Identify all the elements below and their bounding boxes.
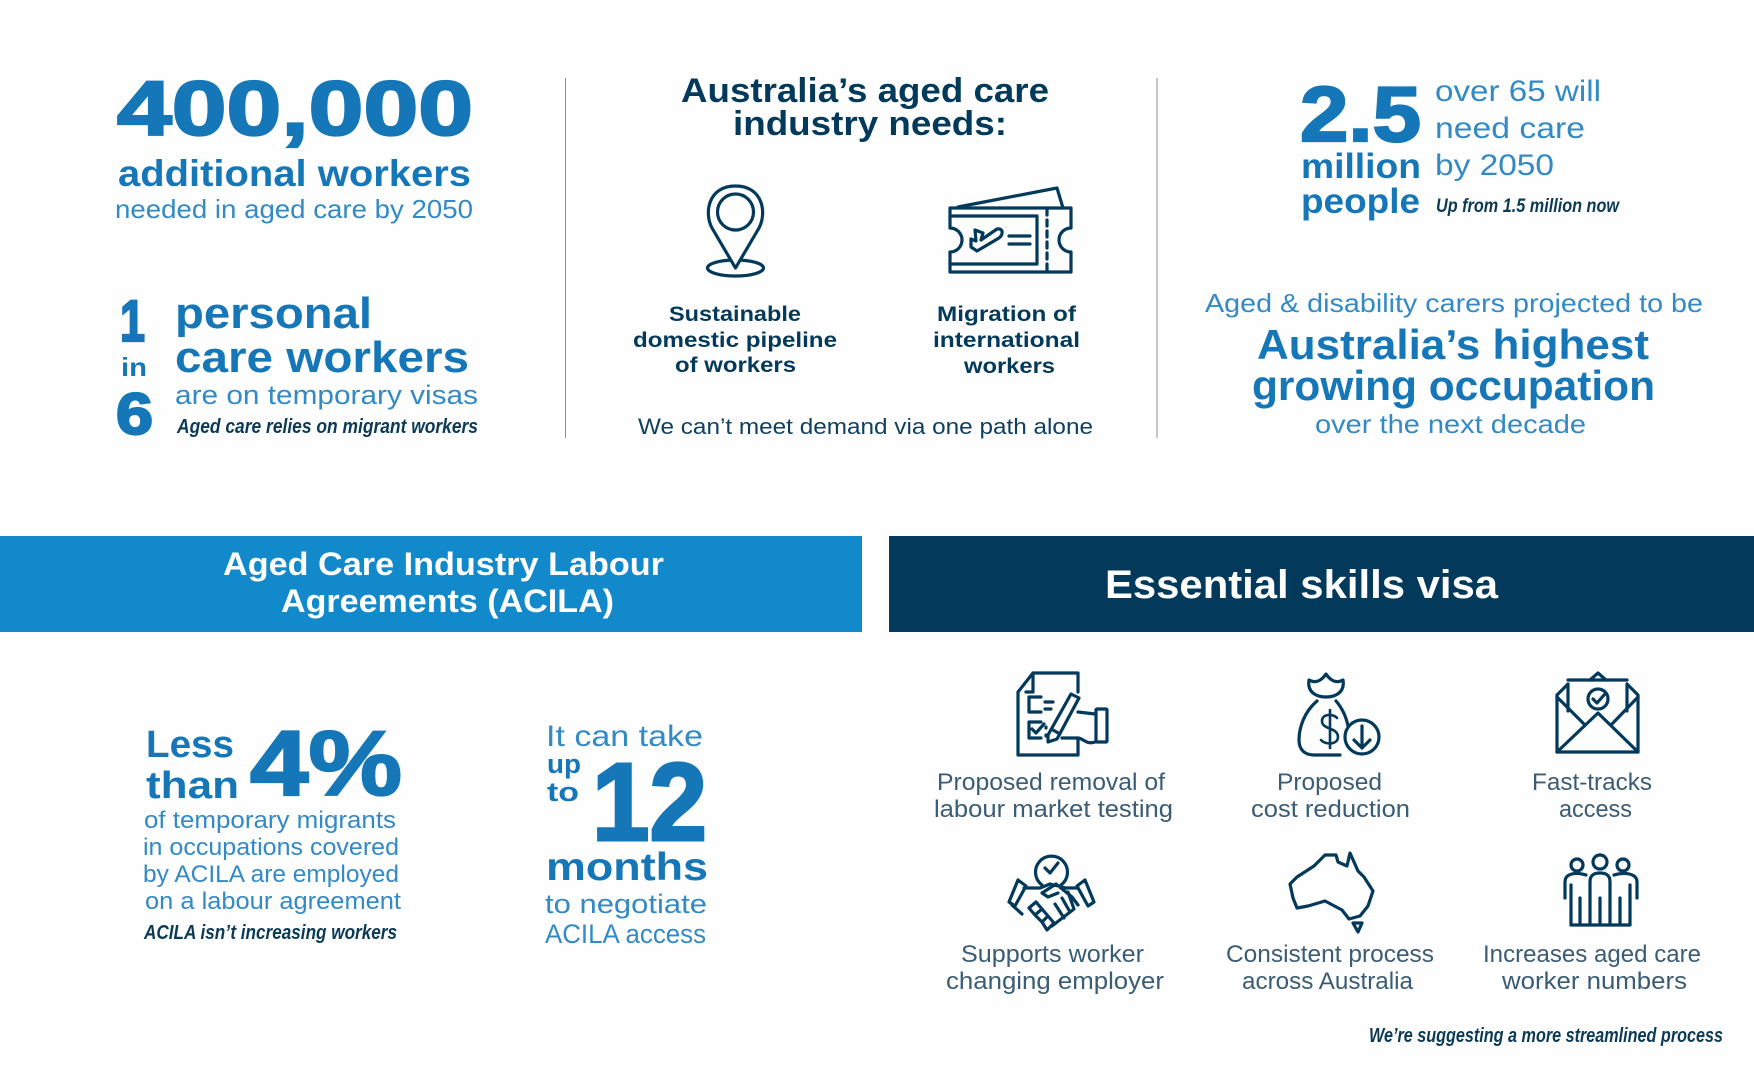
text: cost reduction: cost reduction (1251, 796, 1410, 823)
statistic: 1 in 6 (116, 289, 153, 447)
statistic: up to 12 months: months (546, 846, 708, 889)
panel: essential skills visa benefits (934, 673, 1723, 1047)
banner: ACILA: Agreements (ACILA) (281, 583, 614, 619)
icon: group of people (1565, 855, 1637, 925)
text: changing employer (946, 941, 1164, 995)
banner: essential skills visa: Essential skills visa (1105, 563, 1499, 607)
text: changing employer: Supports worker (961, 941, 1144, 968)
panel: up to 12 months (545, 720, 708, 949)
caption: over 65: over 65 will (1435, 75, 1601, 108)
statistic: up to 12 months: to (547, 777, 579, 807)
label: international migration: Migration of (937, 303, 1077, 326)
heading: personal care workers: personal (175, 289, 372, 338)
banner: ACILA (0, 536, 862, 632)
text: fast-tracks access: access (1559, 796, 1632, 823)
statistic: up to 12 months (546, 741, 708, 889)
heading: highest growing occupation (1252, 321, 1655, 409)
caption: temporary migrants: in occupations covered (143, 834, 399, 861)
text: cost reduction (1251, 769, 1410, 823)
heading: personal care workers: care workers (175, 333, 469, 382)
statistic: 1 in 6: in (121, 352, 147, 382)
caption: temporary migrants (143, 807, 401, 915)
statistic: up to 12 months: up (547, 749, 581, 779)
caption: one path alone: We can’t meet demand via one path alone (638, 414, 1093, 439)
caption: temporary migrants: by ACILA are employed (143, 861, 399, 888)
label: domestic pipeline: domestic pipeline (633, 329, 837, 352)
caption: negotiate access: to negotiate (545, 889, 707, 919)
statistic: 400,000: 400,000 (117, 66, 473, 152)
statistic: less than 4%: than (146, 765, 239, 807)
heading: additional workers: additional workers (118, 153, 471, 194)
text: changing employer: changing employer (946, 968, 1164, 995)
handwritten note: ACILA not increasing workers: ACILA isn’t increasing workers (143, 922, 397, 944)
statistic: 2.5 million people: 2.5 (1300, 70, 1421, 158)
text: consistent process (1226, 941, 1434, 995)
text: labour market testing: labour market testing (934, 796, 1173, 823)
caption: over 65: by 2050 (1435, 149, 1554, 182)
icon: document and pen (1018, 673, 1107, 755)
caption: negotiate access (545, 889, 707, 949)
text: labour market testing: Proposed removal of (937, 769, 1165, 796)
caption: needed by 2050: needed in aged care by 2050 (115, 194, 473, 224)
caption: it can take: It can take (546, 720, 703, 753)
statistic: 2.5 million people (1300, 70, 1421, 221)
caption: temporary migrants: on a labour agreement (145, 888, 401, 915)
label: international migration (933, 303, 1080, 378)
text: fast-tracks access: Fast-tracks (1532, 769, 1652, 796)
handwritten note: migrant workers: Aged care relies on migrant workers (176, 416, 478, 438)
text: consistent process: across Australia (1242, 968, 1414, 995)
label: domestic pipeline (633, 303, 837, 377)
heading: highest growing occupation: growing occupation (1252, 362, 1655, 409)
panel: industry needs (633, 72, 1093, 439)
banner: ACILA: Aged Care Industry Labour (223, 546, 664, 582)
statistic: less than 4% (146, 713, 402, 815)
statistic: 1 in 6: 6 (116, 382, 153, 447)
label: international migration: workers (963, 355, 1055, 378)
caption: over 65: need care (1435, 112, 1585, 145)
icon: money bag (1299, 674, 1379, 755)
caption: negotiate access: ACILA access (545, 919, 706, 949)
panel: less than 4% (143, 713, 402, 944)
heading: industry needs: Australia’s aged care (681, 72, 1049, 110)
text: consistent process: Consistent process (1226, 941, 1434, 968)
heading: industry needs: industry needs: (733, 105, 1007, 143)
text: labour market testing (934, 769, 1173, 823)
handwritten note: up from 1.5 million: Up from 1.5 million now (1436, 196, 1620, 217)
statistic: 2.5 million people: people (1301, 182, 1420, 221)
text: cost reduction: Proposed (1277, 769, 1382, 796)
label: domestic pipeline: of workers (675, 354, 796, 377)
statistic: up to 12 months: 12 (592, 741, 707, 864)
statistic: less than 4%: Less (146, 724, 234, 766)
caption: over 65 (1435, 75, 1601, 182)
caption: carers projected: Aged & disability carers projected to be (1205, 288, 1703, 318)
heading: personal care workers (175, 289, 469, 382)
icon: location pin (708, 186, 764, 276)
icon: handshake (1009, 856, 1094, 930)
text: worker numbers: Increases aged care (1483, 941, 1701, 968)
text: fast-tracks access (1532, 769, 1652, 823)
text: worker numbers (1483, 941, 1701, 995)
caption: next decade: over the next decade (1315, 409, 1586, 439)
icon: map of Australia (1290, 853, 1373, 932)
statistic: 2.5 million people: million (1301, 147, 1421, 186)
statistic: less than 4%: 4% (250, 713, 402, 815)
panel: people needing care (1205, 70, 1703, 439)
caption: temporary visas: are on temporary visas (175, 380, 478, 410)
statistic: 1 in 6: 1 (120, 289, 145, 354)
banner: essential skills visa (889, 536, 1754, 632)
text: worker numbers: worker numbers (1501, 968, 1687, 995)
icon: plane ticket (950, 188, 1071, 272)
label: domestic pipeline: Sustainable (669, 303, 801, 326)
heading: industry needs (681, 72, 1049, 143)
caption: temporary migrants: of temporary migrants (144, 807, 396, 834)
icon: envelope (1557, 673, 1638, 752)
label: international migration: international (933, 329, 1080, 352)
panel: workers needed (115, 66, 478, 447)
heading: highest growing occupation: Australia’s highest (1257, 321, 1649, 368)
